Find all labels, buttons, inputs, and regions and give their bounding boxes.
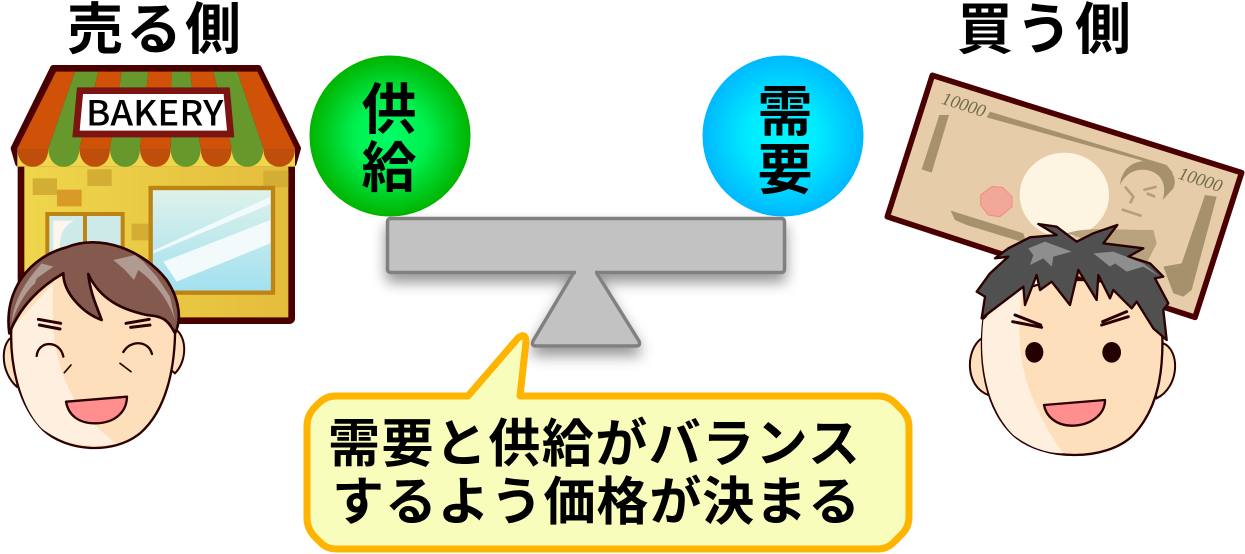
illustration: 10000 yen banknote: 10000 [1176, 163, 1225, 196]
sign: bakery: BAKERY [86, 85, 224, 135]
label: supply [361, 79, 417, 199]
demand ball [702, 56, 864, 216]
label: demand: 需 [757, 81, 813, 143]
label: supply: 給 [361, 137, 417, 199]
supply ball [310, 56, 470, 216]
illustration: 10000 yen banknote [887, 75, 1242, 317]
callout [307, 336, 909, 549]
illustration: bakery shop [14, 68, 298, 321]
label: demand: 要 [757, 139, 813, 201]
callout text [328, 416, 860, 532]
balance scale [388, 218, 784, 346]
callout text: するよう価格が決まる [332, 474, 860, 532]
callout text: 需要と供給がバランス [328, 416, 860, 474]
illustration: 10000 yen banknote: 10000 [939, 88, 988, 121]
illustration: buyer face [970, 224, 1175, 455]
label: demand [757, 81, 813, 201]
label: supply: 供 [361, 79, 417, 141]
illustration: smiling seller face [4, 242, 184, 448]
